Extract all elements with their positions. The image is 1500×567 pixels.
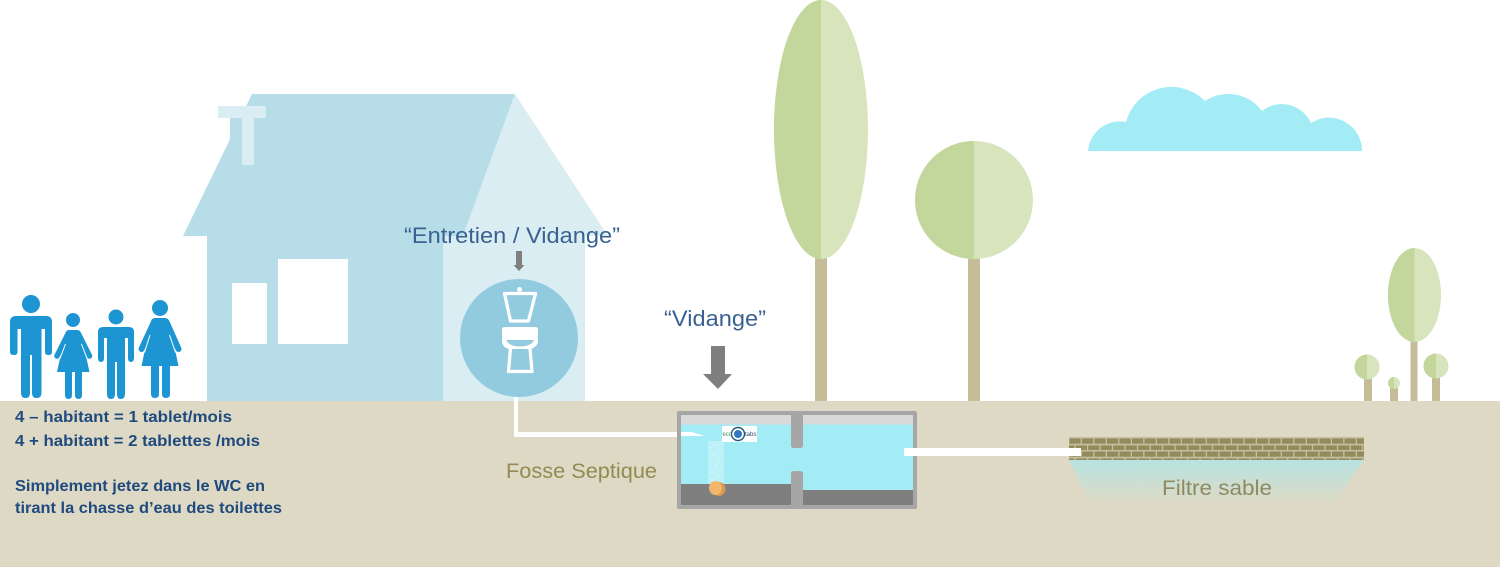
label: Filtre sable: Filtre sable [1162,477,1272,500]
outlet pipe [904,448,1081,456]
label: Entretien / Vidange: “Entretien / Vidange” [404,223,620,248]
icon: toilet in circle [460,279,578,397]
label: Fosse Septique: Fosse Septique [506,460,657,483]
big arrow down [703,346,732,389]
inlet nozzle [681,432,704,436]
tall tree [774,0,868,401]
dosage line 2: 4 + habitant = 2 tablettes /mois [15,433,260,450]
logo [722,426,757,442]
tablets [709,481,726,496]
logo: tabs [745,432,756,438]
small window [232,283,267,344]
small tree left [1354,354,1380,401]
sand bed [1069,460,1364,505]
sludge layer right [803,490,913,505]
usage line 1: Simplement jetez dans le WC en [15,478,265,495]
sand filter [1069,437,1364,505]
slim tree right [1388,248,1441,401]
septic tank [677,411,917,509]
logo: eco [722,432,733,438]
dosage line 1: 4 – habitant = 1 tablet/mois [15,409,232,426]
ground [0,401,1500,567]
person: woman [142,300,178,398]
small arrow down [514,251,524,271]
brick layer [1069,437,1364,460]
dosage instructions text [15,409,282,517]
person: man 1 [10,295,52,398]
chimney [218,106,266,165]
tank dividers [791,412,803,508]
large window [278,259,348,344]
person: girl [57,313,90,399]
family pictograms [10,295,178,399]
sludge layer left [681,484,791,505]
round tree [915,141,1033,401]
house [183,94,608,401]
tablet fizz bubbles [708,441,724,484]
house gable wall [443,94,608,401]
person: man 2 [98,310,134,399]
small tree middle [1388,377,1400,401]
label: Vidange: “Vidange” [664,306,766,331]
usage line 2: tirant la chasse d’eau des toilettes [15,500,282,517]
inlet pipe [514,397,681,437]
house main body and roof [183,94,515,401]
cloud [1088,87,1362,151]
small tree right [1424,354,1448,401]
